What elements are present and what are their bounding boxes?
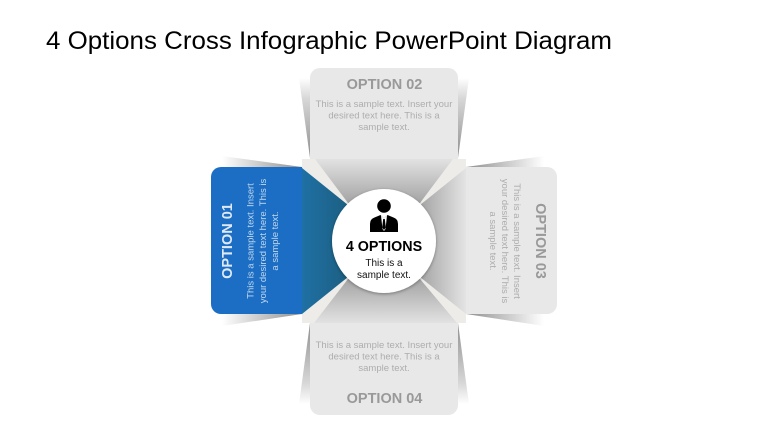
center body text: This is a [365, 258, 403, 269]
body text: option 03 [487, 179, 522, 303]
card: option 02 [310, 68, 458, 159]
heading: option 04: OPTION 04 [347, 391, 422, 407]
central square base [302, 159, 466, 323]
body text: option 04: desired text here. This is a [328, 352, 440, 362]
body text: option 01: your desired text here. This is [258, 179, 269, 303]
connector: option 04 [314, 279, 457, 323]
body text: option 02: This is a sample text. Insert your [316, 99, 452, 110]
body text: option 02: desired text here. This is a [328, 110, 440, 122]
connector: option 02 [315, 159, 453, 203]
body text: option 04 [316, 340, 452, 374]
panel: option 02 [299, 68, 469, 203]
connector: option 01 [302, 168, 348, 314]
body text: option 03: a sample text. [487, 211, 498, 271]
body text: option 02 [316, 99, 452, 133]
card: option 01 [211, 167, 302, 314]
icon: businessman [370, 199, 398, 232]
body text: option 04: This is a sample text. Insert your [316, 340, 452, 351]
center heading: 4 OPTIONS [346, 239, 422, 255]
body text: option 03: This is a sample text. Insert [511, 183, 522, 299]
body text: option 02: sample text. [358, 122, 410, 133]
title: 4 Options Cross Infographic PowerPoint Diagram [46, 27, 612, 55]
heading: option 02: OPTION 02 [347, 77, 422, 93]
panel: option 01 [211, 156, 348, 326]
heading: option 03: OPTION 03 [532, 203, 548, 279]
connector: option 03 [420, 168, 466, 314]
center body text: sample text. [357, 270, 411, 281]
body text: option 01: a sample text. [270, 211, 281, 271]
body text: option 03: your desired text here. This is [499, 179, 510, 303]
wedge shadows: option 02 [299, 78, 469, 158]
body text: option 01 [246, 179, 281, 303]
panel: option 04 [299, 279, 469, 415]
heading: option 01: OPTION 01 [220, 203, 236, 279]
center body text [357, 258, 411, 281]
wedge shadows: option 01 [222, 156, 302, 326]
panel: option 03 [420, 156, 557, 326]
center circle [332, 189, 436, 293]
body text: option 04: sample text. [358, 363, 410, 374]
wedge shadows: option 03 [466, 156, 544, 326]
card: option 03 [466, 167, 557, 314]
wedge shadows: option 04 [299, 323, 469, 404]
body text: option 01: This is a sample text. Insert [246, 183, 256, 299]
card: option 04 [310, 323, 458, 415]
